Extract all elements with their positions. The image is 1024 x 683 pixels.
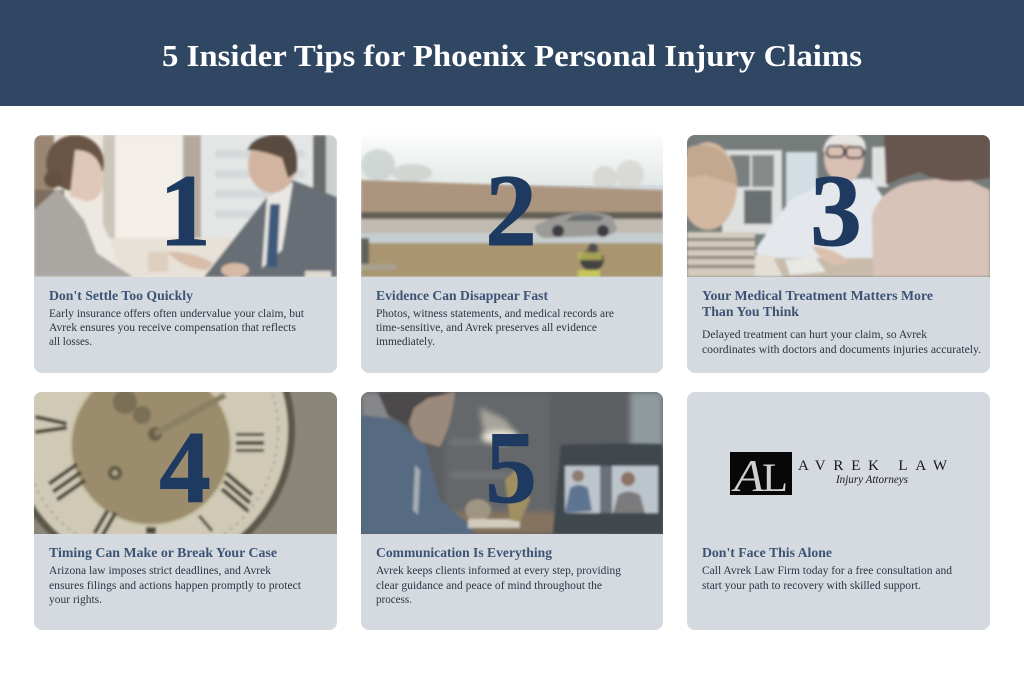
photo: video call (361, 392, 663, 534)
body text: Call Avrek Law Firm today for a free consultation and (702, 565, 952, 577)
heading: Than You Think (702, 304, 799, 319)
body text (49, 308, 305, 348)
panel: tip 4 (34, 392, 337, 630)
body text (49, 565, 302, 606)
logo: Avrek Law (730, 450, 948, 501)
logo: Avrek Law: Injury Attorneys (835, 474, 908, 486)
logo: Avrek Law: L (762, 455, 788, 500)
panel: tip 1 (34, 135, 337, 373)
body text: process. (376, 594, 412, 606)
body text: Arizona law imposes strict deadlines, and Avrek (49, 565, 271, 577)
header banner (0, 0, 1024, 106)
body text: Avrek ensures you receive compensation that reflects (49, 322, 297, 334)
body text: time-sensitive, and Avrek preserves all evidence (376, 322, 597, 334)
body text: Avrek keeps clients informed at every step, providing (376, 565, 621, 577)
number 4: 4 (159, 411, 211, 525)
body text: Photos, witness statements, and medical records are (376, 308, 614, 320)
body text (702, 329, 981, 356)
photo: crash scene road (361, 135, 663, 277)
body text: immediately. (376, 336, 435, 348)
logo: Avrek Law: AVREK LAW (798, 458, 948, 474)
body text (376, 565, 621, 606)
photo: business consultation (34, 135, 337, 277)
heading: Timing Can Make or Break Your Case (49, 545, 277, 560)
panel: tip 5 (361, 392, 663, 630)
body text (376, 308, 614, 348)
body text: Early insurance offers often undervalue your claim, but (49, 308, 305, 320)
logo: Avrek Law: A (731, 450, 765, 501)
body text (702, 565, 952, 592)
heading: Your Medical Treatment Matters More (702, 288, 933, 303)
number 5: 5 (485, 411, 537, 525)
title: 5 Insider Tips for Phoenix Personal Injury Claims (162, 38, 862, 73)
body text: coordinates with doctors and documents injuries accurately. (702, 344, 981, 356)
heading: Communication Is Everything (376, 545, 552, 560)
heading: Don't Settle Too Quickly (49, 288, 193, 303)
number 3: 3 (810, 154, 862, 268)
body text: clear guidance and peace of mind throughout the (376, 580, 602, 592)
body text: your rights. (49, 594, 102, 606)
panel: tip 3 (679, 132, 990, 373)
heading: Evidence Can Disappear Fast (376, 288, 549, 303)
heading (702, 288, 933, 319)
body text: start your path to recovery with skilled support. (702, 580, 921, 592)
photo: doctor visit (679, 132, 990, 277)
number 1: 1 (159, 154, 211, 268)
number 2: 2 (485, 154, 537, 268)
body text: ensures filings and actions happen promptly to protect (49, 580, 302, 592)
heading: Don't Face This Alone (702, 545, 832, 560)
photo: antique clock (34, 392, 337, 534)
panel: tip 2 (361, 135, 663, 373)
body text: all losses. (49, 336, 92, 348)
panel: call to action (687, 392, 990, 630)
body text: Delayed treatment can hurt your claim, so Avrek (702, 329, 927, 341)
